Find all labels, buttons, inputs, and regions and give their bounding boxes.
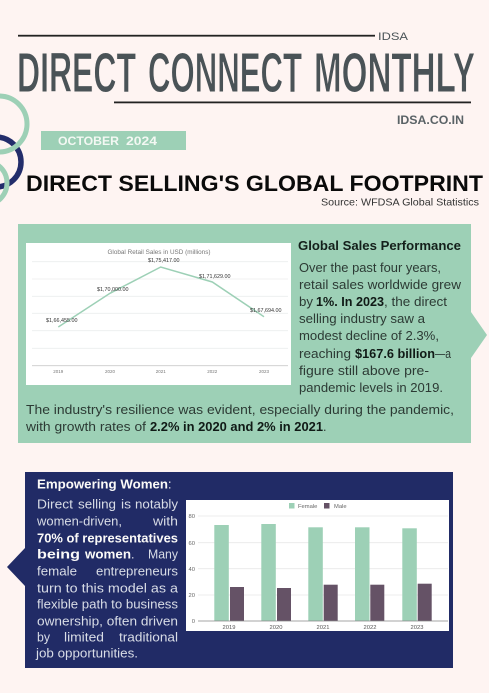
line chart: global retail sales: 2021 — [156, 369, 166, 374]
line chart: global retail sales: $1,75,417.00 — [148, 258, 179, 264]
text: empowering women body: with — [152, 514, 178, 528]
text: empowering women body: flexible path to business — [37, 598, 178, 612]
text: empowering women body: ownership, often driven — [37, 614, 178, 628]
text: global sales body: reaching — [299, 347, 351, 361]
text: resilience paragraph: The industry's resilience was evident, especially during the pandemic, — [26, 403, 454, 417]
text: global sales body — [299, 261, 462, 395]
text: global sales body: retail sales worldwide grew — [299, 278, 462, 292]
decorative rings — [0, 96, 27, 205]
text: global sales body: —a — [435, 347, 451, 361]
text: global sales body: figure still above pre- — [299, 364, 429, 378]
title: DIRECT — [17, 41, 136, 105]
panel background with arrow — [18, 224, 487, 443]
bar chart: female vs male: 20 — [189, 593, 195, 599]
date badge: OCTOBER — [58, 134, 119, 148]
bar chart: female vs male: 2022 — [364, 625, 376, 631]
section heading: DIRECT SELLING'S GLOBAL FOOTPRINT — [26, 171, 484, 196]
text: global sales heading: Global Sales Performance — [298, 238, 461, 253]
text: resilience paragraph: with growth rates of — [25, 420, 147, 434]
panel: empowering women — [7, 472, 453, 668]
text: empowering women body: being — [37, 548, 80, 562]
title: CONNECT — [148, 41, 302, 105]
text: global sales body: $167.6 billion — [355, 347, 435, 361]
bar chart: female vs male: 2023 — [411, 625, 423, 631]
text: empowering women body: turn to this model as a — [37, 582, 178, 596]
bar chart: female vs male: 80 — [189, 514, 195, 520]
text: empowering women body: limited — [64, 630, 104, 644]
bar chart: female vs male: 40 — [189, 567, 195, 573]
text: empowering women body: entrepreneurs — [96, 564, 178, 578]
line chart: global retail sales: Global Retail Sales in USD (millions) — [108, 249, 210, 256]
text: empowering women body: female — [37, 564, 77, 578]
text: global sales body: Over the past four years, — [299, 261, 441, 275]
text: empowering women body: notably — [135, 498, 179, 512]
text: empowering women body — [35, 498, 179, 660]
text: global sales body: selling industry saw a — [299, 312, 425, 326]
panel: global sales — [18, 224, 487, 443]
bar chart: female vs male — [186, 500, 449, 631]
text: global sales body: , the direct — [384, 295, 448, 309]
text: empowering women body: job opportunities. — [35, 646, 138, 660]
text: global sales body: 1%. In 2023 — [316, 295, 384, 309]
line chart: global retail sales: $1,70,000.00 — [97, 287, 128, 293]
chart legend: Male — [334, 504, 347, 510]
text: empowering women body: is — [121, 498, 131, 512]
line chart: global retail sales: 2019 — [53, 369, 64, 374]
text: resilience paragraph: . — [323, 420, 326, 434]
line chart: global retail sales: $1,66,455.00 — [46, 318, 77, 324]
text: global sales body: by — [299, 295, 314, 309]
text: empowering women body: Direct — [37, 498, 74, 512]
text: empowering women heading: : — [168, 478, 171, 492]
text: empowering women body: . — [131, 548, 134, 562]
text: empowering women body: women-driven, — [36, 514, 122, 528]
line chart: global retail sales: $1,67,694.00 — [250, 308, 281, 314]
text: resilience paragraph: 2.2% in 2020 and 2% in 2021 — [150, 420, 323, 434]
title — [17, 41, 475, 105]
text: empowering women body: traditional — [119, 630, 178, 644]
date badge — [41, 131, 186, 150]
text: empowering women heading: Empowering Women — [37, 478, 168, 492]
source note: Source: WFDSA Global Statistics — [321, 196, 479, 208]
panel background with arrow — [7, 472, 453, 668]
line chart: global retail sales — [26, 243, 291, 385]
bar chart: female vs male: 2019 — [223, 625, 235, 631]
date badge: 2024 — [126, 134, 157, 148]
chart legend — [289, 503, 347, 510]
text: empowering women body: women — [84, 548, 131, 562]
text: empowering women body: Many — [148, 548, 179, 562]
line chart: global retail sales: $1,71,629.00 — [199, 274, 230, 280]
line chart: global retail sales: 2022 — [207, 369, 218, 374]
header: website rule: IDSA.CO.IN — [397, 115, 464, 127]
header: IDSA top rule: IDSA — [378, 31, 409, 43]
text: empowering women body: selling — [78, 498, 116, 512]
line chart: global retail sales: 2023 — [259, 369, 270, 374]
bar chart: female vs male: 60 — [189, 541, 195, 547]
line chart: global retail sales: 2020 — [105, 369, 116, 374]
bar chart: female vs male: 2020 — [270, 625, 282, 631]
text: resilience paragraph — [25, 403, 454, 434]
text: global sales body: modest decline of 2.3%, — [299, 329, 439, 343]
bar chart: female vs male: 0 — [192, 619, 195, 625]
chart legend: Female — [298, 504, 317, 510]
text: global sales body: pandemic levels in 2019. — [299, 381, 443, 395]
text: empowering women body: by — [37, 630, 51, 644]
bar chart: female vs male: 2021 — [317, 625, 329, 631]
text: empowering women body: 70% of representatives — [37, 532, 178, 546]
